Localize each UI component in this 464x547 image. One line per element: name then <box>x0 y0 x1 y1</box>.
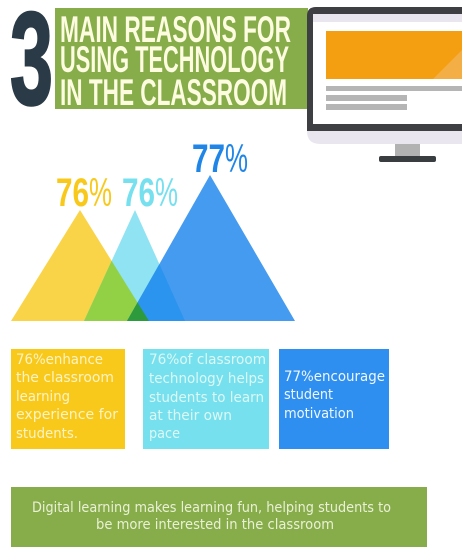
panel: yellow stat: experience for <box>16 407 118 423</box>
label: 76% yellow: 76 <box>56 171 89 215</box>
panel: yellow stat <box>11 349 125 449</box>
title text: MAIN REASONS FOR <box>60 9 291 50</box>
title text: USING TECHNOLOGY <box>60 39 289 80</box>
label: 77% blue: % <box>225 137 248 181</box>
panel: light blue stat: pace <box>149 426 180 442</box>
panel: blue stat: 77%encourage <box>284 369 385 385</box>
label: 76% yellow: % <box>89 171 112 215</box>
title text <box>60 9 291 113</box>
panel: light blue stat: 76%of classroom <box>149 352 266 368</box>
panel: yellow stat: learning <box>16 389 70 405</box>
label: 76% light blue: 76 <box>122 171 155 215</box>
icon: desktop monitor <box>307 7 462 162</box>
panel: blue stat: motivation <box>284 406 354 422</box>
label: 76% light blue: % <box>155 171 178 215</box>
panel: yellow stat: students. <box>16 426 78 442</box>
panel: light blue stat: at their own <box>149 408 232 424</box>
panel: blue stat <box>279 349 389 449</box>
label: 77% blue: 77 <box>192 137 225 181</box>
panel: light blue stat: technology helps <box>149 371 264 387</box>
triangle chart <box>11 175 295 321</box>
panel: conclusion banner: be more interested in the classroom <box>96 517 334 533</box>
title banner <box>10 0 308 132</box>
panel: blue stat: student <box>284 387 333 403</box>
panel: yellow stat: 76%enhance <box>16 352 103 368</box>
panel: yellow stat: the classroom <box>16 370 114 386</box>
panel: conclusion banner <box>11 487 427 547</box>
panel: conclusion banner: Digital learning makes learning fun, helping students to <box>32 500 391 516</box>
panel: light blue stat <box>143 349 269 449</box>
title text: IN THE CLASSROOM <box>60 72 287 113</box>
panel: light blue stat: students to learn <box>149 390 264 406</box>
